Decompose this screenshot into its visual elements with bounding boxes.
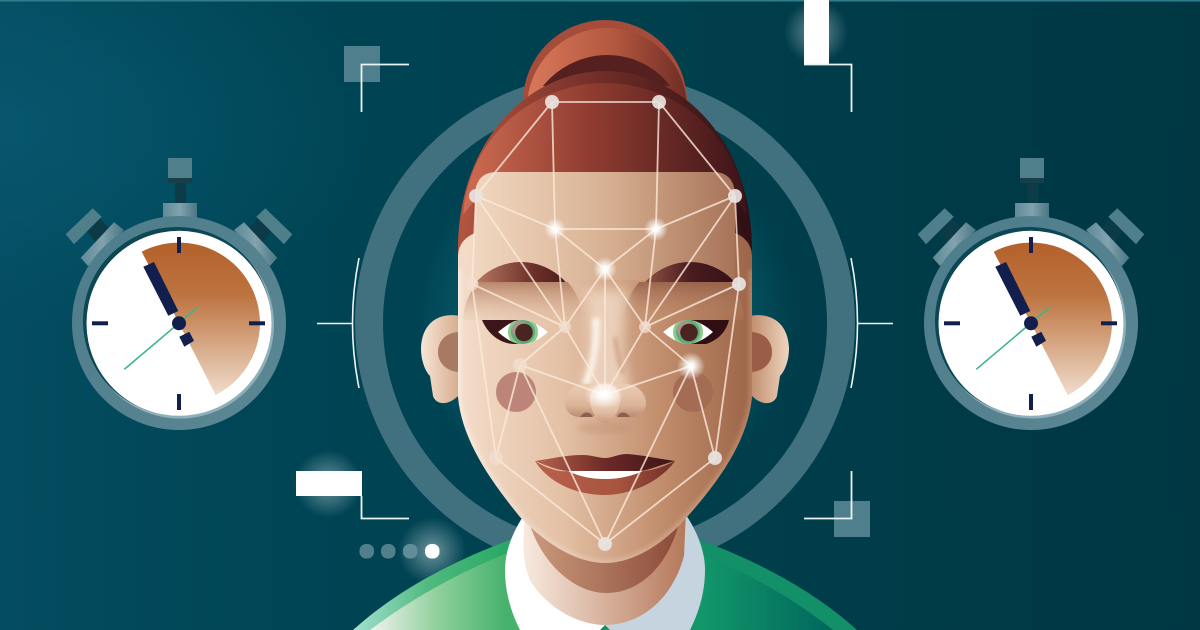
stopwatch right	[918, 158, 1144, 430]
face edge highlight	[458, 270, 752, 563]
face	[458, 172, 752, 563]
eye socket right	[626, 282, 744, 316]
progress dots	[360, 517, 466, 585]
target marks left	[317, 258, 359, 388]
dial	[86, 231, 272, 416]
eye socket left	[464, 282, 580, 318]
eye left	[482, 320, 548, 344]
corner bracket: top left	[344, 46, 409, 112]
corner bracket: bottom left with white bar	[294, 450, 409, 518]
dial	[938, 231, 1124, 416]
tick marks	[92, 237, 265, 410]
eye right	[663, 320, 729, 344]
case	[924, 216, 1138, 430]
collar	[505, 512, 705, 630]
nose	[565, 290, 646, 434]
eyebrow right	[646, 262, 734, 282]
side buttons	[918, 208, 1144, 266]
cheek right	[673, 372, 713, 412]
mouth	[535, 454, 675, 495]
target marks right	[851, 258, 893, 388]
corner bracket: bottom right	[804, 471, 870, 537]
ring behind head	[369, 87, 841, 559]
cheek left	[496, 372, 536, 412]
case	[72, 216, 286, 430]
shoulders: green sweater	[353, 540, 857, 630]
corner bracket: top right with white bar	[784, 0, 852, 112]
elapsed wedge	[994, 243, 1112, 395]
hair	[458, 71, 752, 255]
crown	[163, 158, 197, 219]
hands	[976, 262, 1050, 369]
neck	[523, 510, 686, 625]
hair bun	[523, 20, 687, 188]
side buttons	[66, 208, 292, 266]
hands	[124, 262, 198, 369]
eyebrow left	[476, 262, 566, 282]
face mesh lines	[472, 102, 739, 544]
face mesh nodes	[466, 95, 746, 551]
elapsed wedge	[142, 243, 260, 395]
person	[353, 20, 857, 630]
crown	[1015, 158, 1049, 219]
stopwatch left	[66, 158, 292, 430]
ears	[421, 315, 789, 403]
tick marks	[944, 237, 1117, 410]
